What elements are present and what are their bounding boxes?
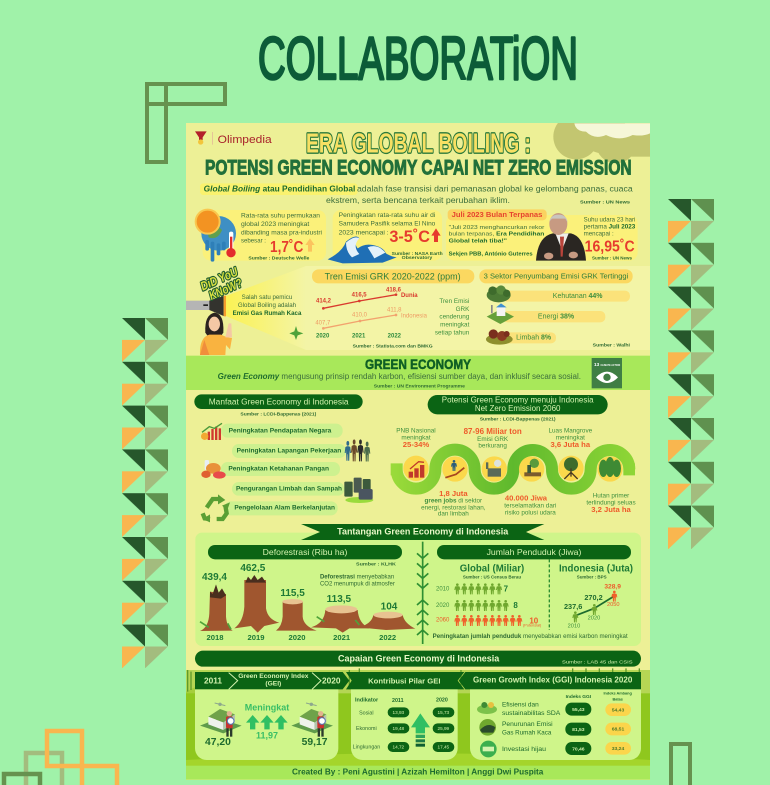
- panel: green growth index: Green Growth Index (GGI) Indonesia 2020: [473, 676, 633, 685]
- panel: population: [433, 545, 633, 640]
- years: 2019: [247, 633, 265, 642]
- panel: green growth index: Gas Rumah Kaca: [502, 730, 552, 737]
- panel: pillar contribution: Sosial: [359, 710, 374, 716]
- icon: building left: [200, 703, 242, 737]
- values: 113,5: [327, 594, 352, 605]
- panel: green economy index: 2020: [322, 675, 341, 685]
- panel: pillar contribution: 2011: [392, 698, 404, 704]
- panel: GHG emission trend: [312, 269, 474, 348]
- potential labels: 3,6 Juta ha: [551, 440, 591, 449]
- panel: GHG emission trend: Sumber : Statista.com dan BMKG: [353, 343, 433, 348]
- panel: pillar contribution: 25,99: [438, 726, 450, 731]
- card: surface temperature: Sumber : Deutsche Welle: [248, 256, 310, 262]
- icon: arrow up red: [431, 228, 441, 242]
- Indonesia population: [559, 563, 633, 629]
- photo: Guterres: [536, 213, 586, 261]
- panel: GHG emission trend: Tren Emisi GRK 2020-2022 (ppm): [325, 271, 461, 281]
- stat: 3-5 C: 3-5˚C: [389, 227, 430, 246]
- panel: top sectors: Kehutanan 44%: [553, 293, 603, 300]
- card: July 2023: pertama Juli 2023: [584, 223, 636, 230]
- icon: big arrow: [411, 713, 430, 747]
- line chart: Indonesia: [401, 314, 428, 320]
- potential labels: risiko polusi udara: [505, 509, 556, 516]
- panel: green growth index: sustainabilitas SDA: [502, 710, 561, 717]
- panel: potential: Net Zero Emission 2060: [475, 404, 561, 413]
- line chart: 407,7: [315, 320, 331, 326]
- panel: benefits: Peningkatan Lapangan Pekerjaan: [237, 447, 342, 454]
- potential labels: terlindungi seluas: [586, 499, 636, 506]
- icon: three arrows: [246, 715, 288, 729]
- icon: food: [201, 460, 226, 479]
- field background: [186, 668, 650, 767]
- Indonesia population: 328,9: [604, 583, 621, 590]
- trend note: [435, 298, 470, 337]
- icon: emission: [479, 719, 496, 736]
- panel: pillar contribution: Indikator: [355, 697, 379, 703]
- potential labels: energi, restorasi lahan,: [421, 504, 486, 511]
- trend note: Tren Emisi: [439, 298, 469, 305]
- values: 104: [381, 601, 398, 612]
- triangle column right: [668, 199, 714, 549]
- panel: green growth index: Investasi hijau: [502, 746, 546, 753]
- icon: SDG 13 climate action: [592, 358, 622, 388]
- potential labels: berkurang: [478, 443, 507, 450]
- ribbon heading: Tantangan Green Economy di Indonesia: [337, 527, 509, 537]
- panel: top sectors: Limbah 8%: [516, 334, 552, 341]
- potential labels: dan limbah: [438, 511, 469, 518]
- panel: green growth index: 55,43: [572, 707, 585, 713]
- panel: pillar contribution: 19,48: [393, 726, 405, 731]
- panel: green growth index: Efisiensi dan: [502, 701, 539, 708]
- label: hottest month: [448, 209, 547, 220]
- Indonesia population: 2050: [607, 602, 620, 608]
- heading pill: Capaian Green Economy di Indonesia: [338, 653, 500, 663]
- benefit list: [221, 424, 346, 515]
- panel: green growth index: 33,24: [612, 746, 624, 752]
- years: 2021: [333, 633, 351, 642]
- line chart: [315, 288, 428, 339]
- intro text: [204, 186, 633, 204]
- icon: workers: [345, 439, 370, 461]
- threshold values: [605, 703, 631, 755]
- panel: pillar contribution: 15,73: [438, 710, 450, 715]
- panel: deforestation: [200, 545, 415, 642]
- icon: SDA: [477, 702, 497, 714]
- panel: pillar contribution: 14,72: [393, 745, 405, 750]
- potential labels: 1,8 Juta: [439, 489, 468, 498]
- panel: top sectors: Sumber : Walhi: [593, 343, 630, 348]
- years: [206, 633, 396, 642]
- card: July 2023: Suhu udara 23 hari: [584, 216, 635, 223]
- line chart: 411,8: [387, 308, 402, 314]
- intro text: ekstrem, serta bencana terkait perubahan iklim.: [326, 195, 510, 205]
- title: era global boiling: ERA GLOBAL BOILING :: [306, 128, 531, 159]
- global population: 2020: [436, 603, 450, 609]
- potential labels: 3,2 Juta ha: [591, 505, 632, 514]
- icon: factory: [486, 460, 501, 477]
- wave ribbon: [391, 450, 635, 489]
- panel: pillar contribution: 2020: [436, 698, 448, 704]
- card: July 2023: Juli 2023 Bulan Terpanas: [452, 210, 542, 219]
- section: challenges: [195, 524, 641, 646]
- trend note: cenderung: [439, 314, 470, 321]
- values: 439,4: [202, 572, 227, 583]
- card: pacific temperature: 2023 mencapai :: [339, 229, 389, 236]
- panel: green economy index: (GEI): [265, 680, 281, 687]
- line chart: Dunia: [401, 293, 418, 299]
- panel: green growth index: 81,53: [572, 727, 585, 733]
- band: green economy: [186, 356, 650, 390]
- panel: green economy index: Meningkat: [245, 703, 289, 713]
- potential labels: Emisi GRK: [477, 436, 509, 443]
- cloud: [553, 123, 650, 164]
- panel: deforestation: CO2 menumpuk di atmosfer: [320, 582, 395, 588]
- icon: recycle: [203, 494, 230, 522]
- beam text: Emisi Gas Rumah Kaca: [233, 310, 302, 317]
- panel: green growth index: Indeks GGI: [566, 694, 592, 700]
- icon: forest: [487, 285, 511, 302]
- global population: 2060: [436, 618, 450, 624]
- panel: green growth index: [459, 672, 641, 760]
- card: July 2023: mencapai :: [584, 231, 614, 238]
- stump 2018: [200, 584, 233, 631]
- stat: 1,7 C: 1,7˚C: [270, 239, 303, 256]
- global population: 10: [529, 616, 539, 625]
- bottom-right frame: [671, 744, 690, 785]
- icon: barrels: [344, 478, 373, 503]
- panel: green economy index: 2011: [204, 675, 222, 685]
- line chart: 2021: [352, 333, 366, 339]
- line chart: 418,6: [386, 288, 402, 294]
- badge: did you know: DiD YoU: [198, 264, 241, 293]
- global population: 2010: [436, 587, 450, 593]
- section: achievements: [186, 651, 650, 780]
- panel: benefits: Peningkatan Ketahanan Pangan: [228, 465, 329, 472]
- footer: credits: Created By : Peni Agustini | Azizah Hemilton | Anggi Dwi Puspita: [292, 768, 544, 777]
- icon: planting: [524, 459, 541, 476]
- icon: sparkle: [289, 326, 303, 340]
- panel: green growth index: 68,51: [612, 727, 624, 733]
- values: [202, 563, 398, 612]
- icon: forest trees: [599, 457, 621, 477]
- heading: benefits: [194, 394, 363, 409]
- bottom-left squares: [4, 731, 117, 785]
- panel: pillar contribution: Kontribusi Pilar GEI: [368, 677, 440, 686]
- panel: deforestation: Deforestrasi (Ribu ha): [263, 547, 347, 557]
- Indonesia population: 2020: [588, 615, 600, 621]
- global population: Sumber : US Census Berau: [463, 574, 521, 579]
- card: pacific temperature: Samudera Pasifik selama El Nino: [339, 220, 436, 227]
- panel: benefits: Sumber : LCDI-Bappenas (2021): [240, 412, 317, 418]
- beam text: Salah satu pemicu: [242, 294, 293, 301]
- card: surface temperature: sebesar :: [241, 238, 266, 245]
- panel: green growth index: 70,46: [572, 746, 585, 752]
- card: July 2023: Sumber : UN News: [592, 255, 633, 260]
- card: surface temperature: dibanding masa pra-industri: [241, 229, 322, 236]
- panel: deforestation: Sumber : KLHK: [356, 561, 397, 567]
- trend note: setiap tahun: [435, 330, 470, 337]
- panel: population: Peningkatan jumlah penduduk menyebabkan emisi karbon meningkat: [433, 634, 628, 640]
- panel: pillar contribution: [346, 672, 464, 760]
- badge: did you know: KNoW?: [207, 276, 245, 303]
- panel: benefits: Manfaat Green Economy di Indonesia: [209, 396, 349, 406]
- ribbon heading: [301, 524, 544, 540]
- panel: benefits: Peningkatan Pendapatan Negara: [229, 428, 332, 435]
- footer: credits: [186, 766, 650, 780]
- icon: GNP: [409, 462, 424, 478]
- potential labels: terselamatkan dari: [504, 502, 556, 509]
- potential labels: 87-96 Miliar ton: [464, 427, 522, 436]
- stump chart: [200, 563, 415, 642]
- potential labels: [396, 427, 636, 518]
- global population: 7: [504, 584, 509, 593]
- panel: pillar contribution: Lingkungan: [353, 745, 380, 751]
- Indonesia population: Indonesia (Juta): [559, 563, 633, 574]
- triangle column left: [122, 318, 168, 668]
- panel: green growth index: 54,43: [612, 707, 624, 713]
- years: 2020: [288, 633, 306, 642]
- stump 2022: [359, 612, 415, 630]
- heading: trend: [312, 269, 474, 283]
- panel: deforestation: Deforestrasi menyebabkan: [320, 575, 394, 581]
- grass: [200, 617, 359, 629]
- divider: vine: [417, 542, 428, 644]
- card: July 2023: Sekjen PBB, António Guterres: [449, 251, 533, 257]
- icon row: [403, 456, 623, 482]
- source: Sumber : UN News: [580, 200, 630, 206]
- panel: benefits: [194, 394, 373, 522]
- potential labels: meningkat: [401, 434, 431, 441]
- intro text: adalah fase transisi dari pemanasan global ke gelombang panas, cuaca: [357, 184, 633, 194]
- potential labels: green jobs di sektor: [424, 498, 482, 505]
- panel: green economy index: Green Economy Index: [238, 673, 309, 680]
- line chart: 414,2: [316, 299, 332, 305]
- trend note: meningkat: [440, 322, 470, 329]
- panel: potential: [391, 395, 636, 518]
- badge: did you know: [200, 266, 242, 301]
- icon: green jobs: [445, 460, 464, 478]
- beam text: [233, 294, 302, 315]
- panel: pillar contribution: Ekonomi: [356, 726, 377, 732]
- potential labels: 25-34%: [403, 440, 429, 449]
- icon: melting earth: [196, 210, 236, 262]
- panel: top sectors: 3 Sektor Penyumbang Emisi GRK Tertinggi: [484, 271, 629, 280]
- potential labels: meningkat: [556, 434, 585, 441]
- data pills: [388, 707, 454, 752]
- panel: pillar contribution: 13,93: [393, 710, 405, 715]
- line chart: 410,0: [352, 313, 368, 319]
- Indonesia population: Sumber : BPS: [577, 574, 607, 579]
- stump 2020: [276, 599, 317, 631]
- panel: top sectors: Energi 38%: [538, 313, 575, 320]
- values: 462,5: [240, 563, 266, 574]
- Indonesia population: 237,6: [564, 602, 582, 611]
- panel: green economy index: 59,17: [302, 737, 328, 748]
- global population: [436, 563, 542, 628]
- card: pacific temperature: [328, 210, 443, 263]
- icon: building right: [291, 703, 333, 737]
- icon: income chart: [201, 423, 222, 440]
- panel: potential: Potensi Green Economy menuju Indonesia: [442, 396, 594, 405]
- section: trend and sectors: [186, 264, 650, 390]
- card: July 2023: [446, 209, 638, 261]
- values: 115,5: [280, 588, 305, 599]
- line chart: 2022: [388, 333, 402, 339]
- illustration: woman pointing: [200, 313, 232, 355]
- stump 2021: [311, 605, 369, 633]
- challenges background: [195, 533, 641, 646]
- card: surface temperature: global 2023 meningkat: [241, 221, 309, 228]
- stat: 16,95 C: 16,95˚C: [585, 239, 635, 256]
- section: header and global boiling facts: [194, 123, 650, 264]
- global population: (Potensial): [523, 624, 542, 628]
- panel: green growth index: Indeks Ambang: [603, 692, 632, 696]
- icon: SDG 13 climate action: 13 CLIMATE ACTION: [594, 362, 620, 367]
- highlight: [200, 183, 358, 195]
- panel: pillar contribution: 17,45: [438, 745, 450, 750]
- panel: green economy index: [195, 672, 349, 760]
- icon: wave: [328, 236, 397, 263]
- Indonesia population: 2010: [568, 623, 580, 629]
- card: pacific temperature: Sumber : NASA Earth: [392, 251, 443, 257]
- GGI values: [565, 703, 591, 755]
- beam text: Global Boiling adalah: [238, 302, 297, 309]
- line chart: 416,5: [352, 293, 367, 299]
- years: 2022: [379, 633, 396, 642]
- logo: Olimpedia: Olimpedia: [218, 134, 273, 146]
- panel: benefits: Pengelolaan Alam Berkelanjutan: [234, 505, 335, 512]
- logo: Olimpedia: [195, 131, 273, 146]
- quote: Global telah tiba!": [449, 238, 507, 244]
- heading: collaboration: COLLABORATiON: [258, 25, 578, 92]
- band: green economy: Sumber : UN Environment Programme: [374, 384, 465, 390]
- years: 2018: [206, 633, 224, 642]
- Indonesia population: 270,2: [584, 593, 603, 602]
- card: pacific temperature: Peningkatan rata-rata suhu air di: [339, 212, 436, 219]
- panel: top sectors: [479, 269, 633, 348]
- panel: potential: Sumber : LCDI-Bappenas (2021): [480, 417, 556, 423]
- heading pill: Sumber : LAB 45 dan CSIS: [562, 659, 633, 665]
- panel: green economy index: 47,20: [205, 737, 231, 748]
- panel: green growth index: Batas: [612, 698, 623, 702]
- intro text: Global Boiling atau Pendidihan Global: [204, 184, 355, 194]
- icon: energy house: [487, 303, 514, 324]
- line chart: 2020: [316, 333, 330, 339]
- global population: 8: [513, 601, 518, 610]
- quote: "Juli 2023 menghancurkan rekor: [449, 225, 544, 231]
- panel: green economy index: 11,97: [256, 730, 278, 740]
- flashlight beam: [226, 266, 306, 350]
- stump 2019: [234, 575, 279, 633]
- decorative L frame: [147, 84, 225, 162]
- card: pacific temperature: Observatory: [402, 255, 433, 261]
- icon: mangrove: [564, 457, 578, 479]
- icon: flashlight: [186, 296, 226, 316]
- potential labels: PNB Nasional: [396, 428, 436, 435]
- trend background: [306, 266, 650, 350]
- section: benefits and potential: [194, 394, 636, 522]
- card: surface temperature: [196, 210, 326, 262]
- potential labels: Hutan primer: [593, 492, 629, 499]
- panel: benefits: Pengurangan Limbah dan Sampah: [236, 485, 342, 492]
- panel: population: Jumlah Penduduk (Jiwa): [487, 547, 581, 557]
- quote: bulan terpanas, Era Pendidihan: [449, 232, 545, 238]
- band: green economy: Green Economy mengusung prinsip rendah karbon, efisiensi sumber daya, dan inklusif secara sosial.: [218, 372, 581, 381]
- icon: waste trees: [486, 329, 513, 345]
- potential labels: 40.000 Jiwa: [505, 493, 548, 502]
- trend note: GRK: [456, 306, 470, 313]
- potential labels: Luas Mangrove: [549, 428, 593, 435]
- panel: green growth index: Penurunan Emisi: [502, 721, 553, 728]
- heading pill: [195, 651, 641, 667]
- icon: arrow up: [305, 238, 315, 252]
- icon: green investment: [480, 741, 497, 757]
- band: green economy: GREEN ECONOMY: [365, 357, 471, 372]
- global population: Global (Miliar): [460, 563, 524, 574]
- quote: [449, 225, 545, 244]
- card: surface temperature: Rata-rata suhu permukaan: [241, 213, 320, 220]
- infographic poster: [186, 107, 650, 780]
